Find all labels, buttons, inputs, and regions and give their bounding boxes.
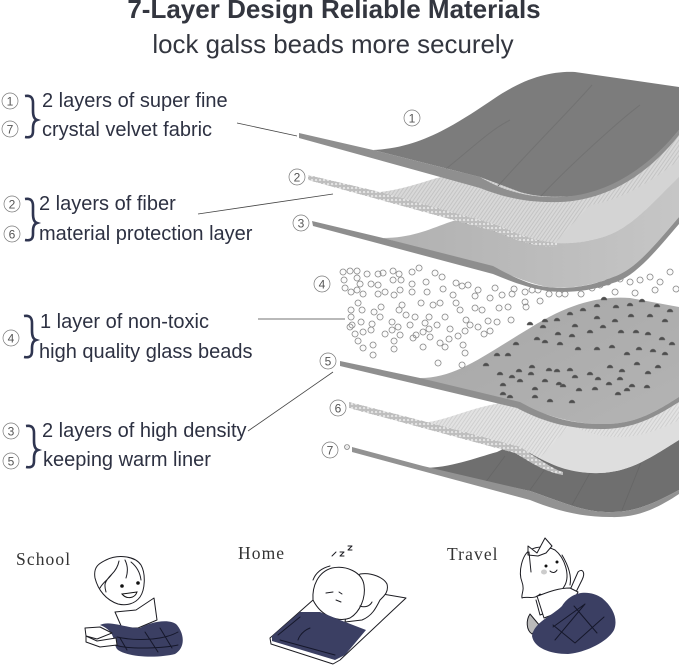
label group: glass beads: 4 [8,332,15,346]
title [127,0,541,59]
layer 2: fiber mesh [308,100,679,247]
layer number markers: 6 [335,402,342,416]
label group: fiber layer: 2 [9,198,16,212]
layer number markers: 4 [319,278,326,292]
layer 7: velvet base [344,420,679,517]
scene: school [16,549,183,657]
illustration: girl with blanket [520,538,616,654]
label group: velvet fabric: 1 [7,94,14,108]
layer 1: velvet top [299,72,679,202]
layer number markers [289,110,420,458]
scene: school: School [16,549,71,569]
layer number markers: 7 [327,444,334,458]
layer number markers: 3 [298,216,305,230]
layer 6: fiber mesh [349,380,679,475]
scene: home: Home [238,543,285,563]
glass beads [340,265,679,403]
label group: glass beads [3,311,252,363]
label group: fiber layer: 2 layers of fiber [39,193,176,215]
label group: glass beads: 1 layer of non-toxic [40,311,209,333]
label group: fiber layer: material protection layer [39,223,253,245]
title: lock galss beads more securely [152,31,514,59]
label group: warm liner: 5 [8,454,15,468]
label group: glass beads: high quality glass beads [39,341,252,363]
label group: fiber layer [4,193,253,245]
layer 3: liner [312,150,679,292]
layer number markers: 1 [409,112,416,126]
label group: warm liner: 3 [8,424,15,438]
label group: warm liner: 2 layers of high density [42,420,247,442]
layer number markers: 2 [294,170,301,184]
leader lines [198,123,345,431]
scene: travel: Travel [447,544,499,564]
layer number markers: 5 [325,354,332,368]
label group: fiber layer: 6 [9,228,16,242]
label group: velvet fabric [2,90,228,141]
scene: travel [447,538,616,654]
illustration: boy reading with blanket [85,557,183,657]
label group: velvet fabric: crystal velvet fabric [42,119,212,141]
label group: warm liner: keeping warm liner [43,449,211,471]
illustration: child sleeping on mattress [270,546,406,664]
label group: velvet fabric: 7 [7,122,14,136]
scene: home [238,543,406,664]
label group: velvet fabric: 2 layers of super fine [42,90,228,112]
label group: warm liner [3,420,247,471]
layer 5: liner with beads [340,298,679,429]
